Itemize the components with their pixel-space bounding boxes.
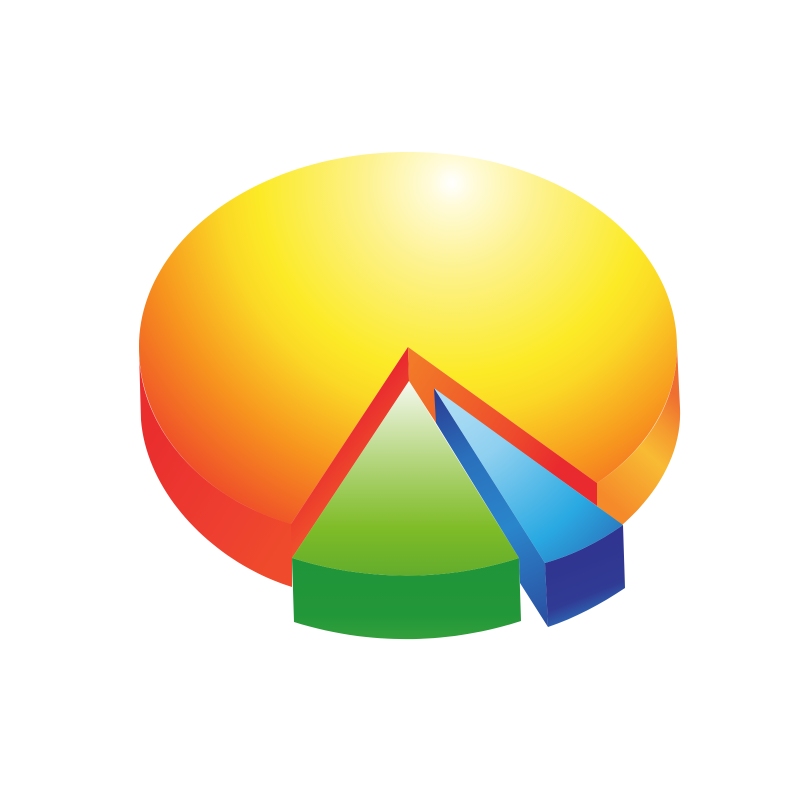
blue slice: [434, 388, 625, 627]
pie top surface: [139, 152, 677, 524]
green slice: [292, 381, 521, 639]
notch wall: left red: [291, 347, 409, 558]
blue slice inner wall: [434, 388, 548, 627]
green slice side: [292, 558, 521, 639]
pie outer side: right: [597, 347, 680, 525]
notch wall: right orange-red: [408, 347, 597, 506]
pie outer side: left: [139, 350, 292, 587]
green slice top: [292, 381, 519, 576]
blue slice top: [434, 388, 623, 563]
blue slice side: [545, 525, 625, 627]
